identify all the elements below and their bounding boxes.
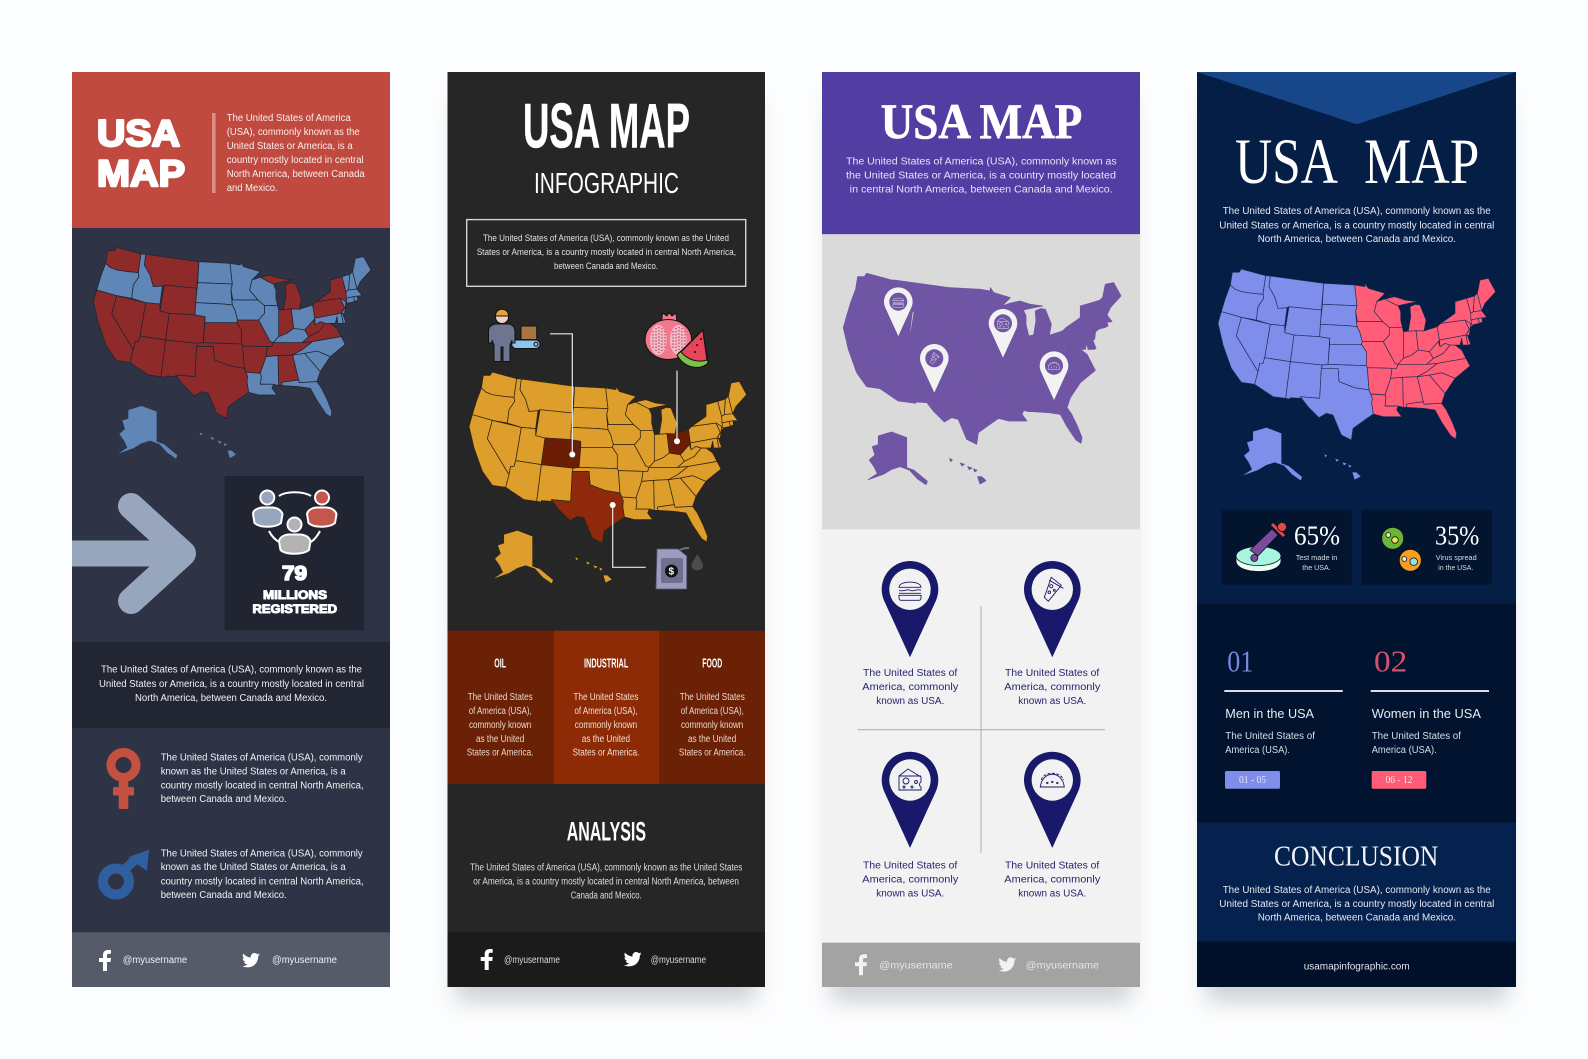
connector: worker to Colorado: [550, 334, 575, 458]
footer: social handles: @myusername: [1026, 959, 1099, 971]
panel 2 shadow: [456, 100, 756, 1002]
analysis section: or America, is a country mostly located in central North America, between: [473, 876, 739, 888]
dark text band: United States or America, is a country mostly located in central: [99, 679, 364, 690]
bordered intro text box: [467, 220, 746, 286]
column: oil: of America (USA),: [469, 706, 532, 717]
female text: between Canada and Mexico.: [161, 794, 287, 805]
stat card: 35%: [1362, 510, 1492, 585]
analysis section: ANALYSIS: [567, 817, 646, 847]
column: food: States or America.: [679, 748, 746, 759]
three sector columns: [448, 631, 765, 784]
analysis section: The United States of America (USA), commonly known as the United States: [470, 862, 742, 874]
title: MAP: [97, 153, 185, 194]
panel 1 background: [72, 72, 390, 987]
pin: pizza: [920, 344, 949, 393]
food item: pizza: known as USA.: [1018, 696, 1086, 707]
bordered intro text box: States or America, is a country mostly located in central North America,: [477, 247, 736, 258]
icon: female symbol: [111, 752, 136, 809]
stat card: 65%: [1222, 510, 1352, 585]
column: oil: commonly known: [469, 720, 531, 731]
small map pins: [884, 287, 1068, 400]
column: industrial: of America (USA),: [574, 706, 638, 717]
intro text: North America, between Canada and Mexico.: [1258, 234, 1456, 245]
food item: taco: America, commonly: [1004, 874, 1100, 886]
column: men: America (USA).: [1225, 745, 1290, 756]
footer: social handles: [822, 943, 1140, 987]
analysis section: Canada and Mexico.: [571, 890, 642, 902]
header band: [72, 72, 390, 228]
food item: cheese: The United States of: [863, 860, 958, 872]
title: USA: [1235, 126, 1338, 198]
male text: country mostly located in central North America,: [161, 876, 364, 887]
footer: social handles: @myusername: [504, 955, 560, 966]
column: men: The United States of: [1225, 731, 1315, 742]
icon: dropper and petri dish: [1236, 522, 1286, 572]
column: women: 02: [1374, 644, 1407, 679]
stat figures: REGISTERED: [252, 602, 337, 616]
footer: social handles: [448, 932, 765, 987]
title: [523, 92, 690, 200]
food item: pizza: America, commonly: [1004, 682, 1100, 693]
stat card: 79 millions registered: [224, 476, 364, 630]
food item: burger: known as USA.: [876, 696, 944, 707]
conclusion section: United States or America, is a country mostly located in central: [1219, 899, 1494, 910]
male text: The United States of America (USA), commonly: [161, 848, 363, 859]
column: food: of America (USA),: [681, 706, 744, 717]
footer: social handles: @myusername: [651, 955, 706, 966]
arrow: [72, 506, 183, 601]
stat figures: 79: [282, 563, 307, 585]
panel 3 background: [822, 72, 1140, 987]
female text: The United States of America (USA), commonly: [161, 753, 363, 764]
stat card: 65%: 65%: [1294, 520, 1340, 550]
column: food: FOOD: [702, 656, 722, 671]
food item: taco: The United States of: [1005, 860, 1100, 872]
column: food: as the United: [688, 734, 736, 745]
intro text: The United States of America (USA), commonly known as the: [1223, 206, 1491, 217]
icon: oil can: $: [668, 566, 674, 578]
intro text: The United States of America (USA), commonly known as: [846, 156, 1117, 167]
panel: purple map with location pins: [822, 72, 1140, 987]
column: industrial: INDUSTRIAL: [584, 656, 628, 671]
map: gold states with highlights: [469, 372, 747, 583]
intro text: and Mexico.: [227, 183, 278, 194]
column: industrial: The United States: [574, 692, 639, 703]
pin: cheese: [989, 309, 1017, 358]
dark text band: North America, between Canada and Mexico.: [135, 693, 327, 704]
icon: pomegranate and watermelon: [645, 312, 708, 367]
column: industrial: States or America.: [573, 748, 639, 759]
bordered intro text box: The United States of America (USA), commonly known as the United: [483, 233, 729, 244]
stat card: 35%: 35%: [1435, 520, 1479, 550]
dark section: men and women: [1197, 604, 1516, 823]
intro text: The United States of America: [227, 113, 351, 124]
column: food: commonly known: [681, 720, 743, 731]
intro text: [227, 113, 365, 194]
title: USA: [97, 113, 180, 154]
footer: social handles: [72, 932, 390, 987]
food item: cheese: [862, 752, 958, 900]
chevron banner: [1197, 72, 1516, 124]
column: oil: as the United: [476, 734, 524, 745]
title: [97, 113, 185, 194]
title: [1235, 126, 1479, 198]
intro text: United States or America, is a: [227, 141, 353, 152]
footer: website: [1197, 942, 1516, 987]
intro text: United States or America, is a country mostly located in central: [1219, 220, 1494, 232]
intro text: [1219, 206, 1494, 245]
dark text band: [72, 642, 390, 728]
conclusion section: The United States of America (USA), commonly known as the: [1223, 885, 1491, 896]
map section background: [822, 234, 1140, 529]
pin: burger: [884, 287, 913, 336]
column: women: 06 - 12: [1386, 775, 1412, 786]
bordered intro text box: between Canada and Mexico.: [554, 261, 658, 272]
title: MAP: [1364, 126, 1479, 198]
food item: pizza: [1004, 561, 1100, 707]
female text: country mostly located in central North America,: [161, 780, 364, 792]
intro text: North America, between Canada: [227, 169, 365, 180]
column: women: The United States of: [1372, 731, 1461, 742]
map: purple silhouette: [843, 273, 1121, 485]
column: men: [1224, 644, 1343, 789]
stat card: 35%: in the USA.: [1438, 563, 1473, 572]
dark text band: The United States of America (USA), commonly known as the: [101, 665, 362, 676]
footer: social handles: @myusername: [123, 955, 188, 966]
male text: between Canada and Mexico.: [161, 890, 287, 901]
connector: fruit to Ohio: [674, 371, 680, 444]
column: food: The United States: [680, 692, 745, 703]
column: oil: [448, 631, 554, 784]
analysis section: [470, 817, 742, 902]
column: food: [659, 631, 765, 784]
panel: navy map with statistics: [1197, 72, 1516, 987]
pin: taco: [1040, 351, 1068, 400]
column: oil: States or America.: [467, 748, 533, 759]
stat card: 65%: the USA.: [1302, 563, 1331, 572]
food item: taco: known as USA.: [1018, 888, 1086, 900]
female text: [161, 753, 364, 805]
male text: known as the United States or America, is a: [161, 862, 346, 873]
column: men: 01 - 05: [1239, 775, 1266, 786]
food item: burger: The United States of: [863, 668, 958, 679]
map: blue west and pink east: [1218, 269, 1496, 480]
panel: red and slate map infographic: [72, 72, 390, 987]
conclusion section: [1197, 823, 1516, 942]
header band: [822, 72, 1140, 234]
female text: known as the United States or America, is a: [161, 766, 346, 777]
intro text: (USA), commonly known as the: [227, 127, 360, 138]
stat figures: [252, 563, 337, 616]
stat figures: MILLIONS: [263, 588, 327, 602]
stat card: 35%: Virus spread: [1436, 553, 1477, 562]
panel 4 background: [1197, 72, 1516, 987]
intro text: country mostly located in central: [227, 155, 364, 166]
food item: cheese: America, commonly: [862, 874, 958, 886]
column: industrial: commonly known: [575, 720, 637, 731]
dividers: [858, 606, 1105, 853]
conclusion section: CONCLUSION: [1274, 842, 1438, 873]
icon: male symbol: [103, 850, 149, 894]
icon: three people: [253, 490, 336, 554]
male text: [161, 848, 364, 901]
title: USA MAP: [881, 93, 1082, 149]
intro text: in central North America, between Canada and Mexico.: [850, 184, 1113, 195]
column: industrial: as the United: [582, 734, 630, 745]
column: men: Men in the USA: [1225, 706, 1314, 721]
icon: oil can: [656, 548, 703, 589]
panel 3 shadow: [831, 100, 1131, 1002]
column: men: 01: [1227, 644, 1253, 679]
intro text: the United States or America, is a country mostly located: [846, 170, 1116, 181]
map: red and blue states: [93, 247, 371, 459]
icon: virus cells: [1382, 527, 1421, 571]
column: industrial: [554, 631, 659, 784]
icon: worker with conveyor: [488, 309, 540, 362]
panel: black and gold map infographic: [448, 72, 765, 987]
connector: Texas to oil can: [610, 502, 646, 567]
food item: cheese: known as USA.: [876, 888, 944, 900]
column: oil: The United States: [468, 692, 533, 703]
footer: website: usamapinfographic.com: [1304, 960, 1410, 972]
column: women: America (USA).: [1372, 745, 1437, 756]
title: INFOGRAPHIC: [534, 168, 679, 200]
food item: taco: [1004, 752, 1100, 900]
panel 4 shadow: [1206, 100, 1507, 1002]
panel 2 background: [448, 72, 765, 987]
column: women: Women in the USA: [1372, 706, 1481, 721]
food item: burger: [862, 561, 958, 707]
stat card: 65%: Test made in: [1296, 553, 1337, 562]
intro text: [846, 156, 1117, 195]
column: women: [1371, 644, 1489, 789]
food item: burger: America, commonly: [862, 682, 958, 693]
column: oil: OIL: [494, 656, 506, 671]
food item: pizza: The United States of: [1005, 668, 1100, 679]
footer: social handles: @myusername: [272, 955, 337, 966]
conclusion section: North America, between Canada and Mexico.: [1258, 912, 1456, 924]
footer: social handles: @myusername: [879, 959, 953, 971]
title: USA MAP: [523, 92, 690, 162]
